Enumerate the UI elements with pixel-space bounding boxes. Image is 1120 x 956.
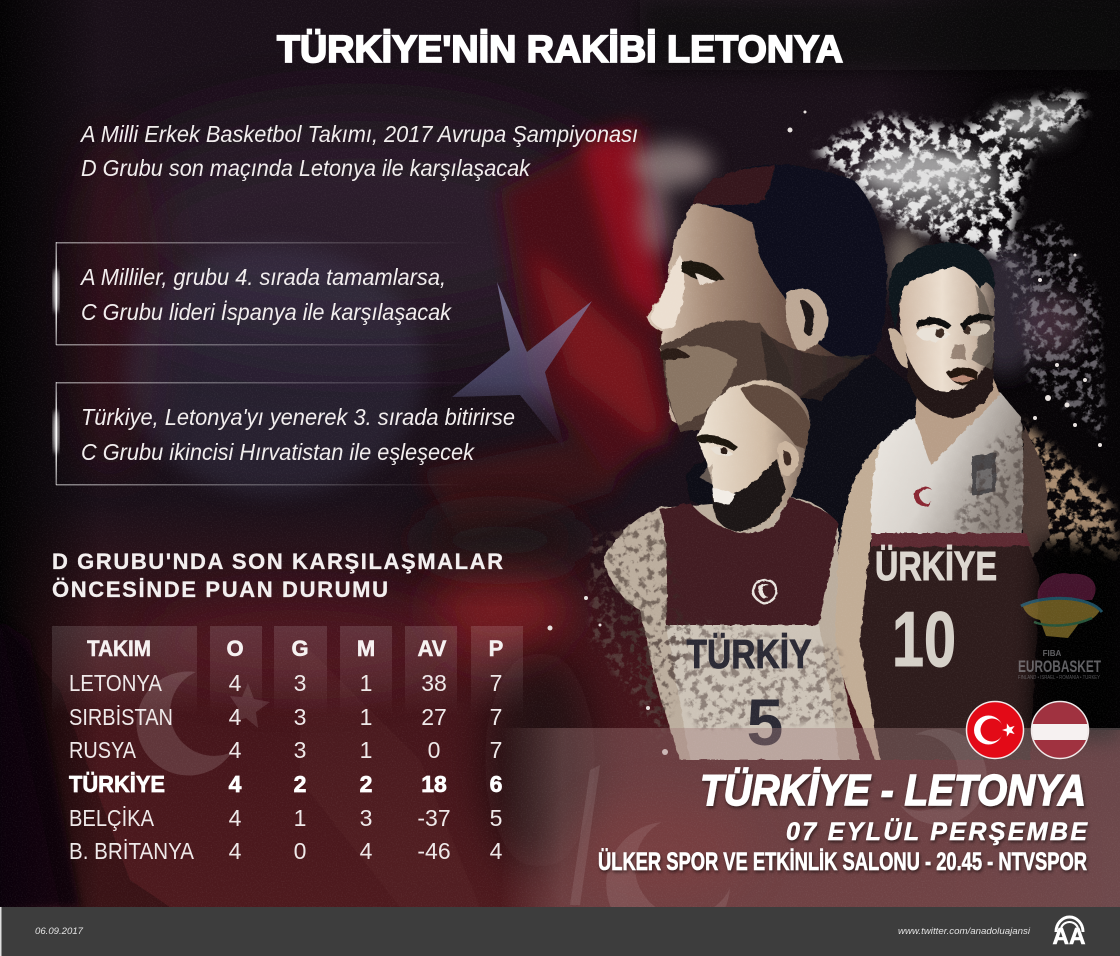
bottom player jersey text bbox=[686, 632, 812, 746]
panel: spain scenario: C Grubu lideri İspanya ile karşılaşacak bbox=[81, 299, 452, 325]
row: Sırbistan: 1 bbox=[360, 704, 372, 730]
row: Belçika: BELÇİKA bbox=[69, 805, 155, 831]
row: B. Britanya: 4 bbox=[490, 838, 503, 864]
row: Rusya: RUSYA bbox=[69, 737, 137, 763]
row: Rusya: 1 bbox=[360, 737, 372, 763]
row: B. Britanya: -46 bbox=[417, 838, 451, 864]
right player jersey text: ÜRKİYE bbox=[875, 543, 997, 589]
table header row: AV bbox=[418, 636, 447, 661]
row: Letonya: 38 bbox=[421, 670, 447, 696]
row: Letonya: 7 bbox=[490, 670, 502, 696]
row: Türkiye: TÜRKİYE bbox=[69, 771, 165, 797]
splatter behind players bbox=[548, 92, 1120, 755]
icon: Latvian flag bbox=[1030, 700, 1090, 760]
row: Belçika: 3 bbox=[360, 805, 372, 831]
row: B. Britanya: B. BRİTANYA bbox=[69, 838, 195, 864]
row: Belçika: 4 bbox=[229, 805, 242, 831]
portraits of the coach and two players bbox=[603, 165, 1120, 760]
icon: AA logo: AA bbox=[1052, 923, 1086, 949]
row: Türkiye: 4 bbox=[229, 771, 242, 797]
row: Türkiye: 6 bbox=[490, 771, 502, 797]
panel: spain scenario: A Milliler, grubu 4. sırada tamamlarsa, bbox=[79, 264, 446, 290]
date: 06.09.2017 bbox=[35, 926, 84, 937]
row: Sırbistan: 4 bbox=[229, 704, 242, 730]
row: Türkiye: 2 bbox=[360, 771, 372, 797]
right player jersey text: 10 bbox=[892, 595, 956, 683]
row: Sırbistan: 27 bbox=[421, 704, 447, 730]
row: Sırbistan bbox=[69, 704, 502, 730]
table header row bbox=[87, 636, 503, 661]
row: Rusya: 7 bbox=[490, 737, 502, 763]
row: Rusya bbox=[69, 737, 502, 763]
row: Rusya: 4 bbox=[229, 737, 242, 763]
match date: 07 EYLÜL PERŞEMBE bbox=[786, 817, 1088, 846]
title: TÜRKİYE'NİN RAKİBİ LETONYA bbox=[277, 28, 843, 71]
row: Türkiye bbox=[69, 771, 502, 797]
row: Belçika: 1 bbox=[294, 805, 306, 831]
row: Letonya: 1 bbox=[360, 670, 372, 696]
standings heading: D GRUBU'NDA SON KARŞILAŞMALAR bbox=[52, 549, 503, 574]
row: B. Britanya: 4 bbox=[229, 838, 242, 864]
row: Belçika bbox=[69, 805, 502, 831]
table header row: P bbox=[489, 636, 503, 661]
bottom player jersey text: TÜRKİY bbox=[686, 631, 812, 677]
standings table bbox=[52, 626, 523, 864]
table header row: M bbox=[357, 636, 375, 661]
EuroBasket logo: FINLAND • ISRAEL • ROMANIA • TURKEY bbox=[1018, 675, 1101, 681]
table header row: O bbox=[226, 636, 244, 661]
row: Türkiye: 2 bbox=[294, 771, 306, 797]
row: B. Britanya: 0 bbox=[294, 838, 306, 864]
intro text: A Milli Erkek Basketbol Takımı, 2017 Avrupa Şampiyonası bbox=[79, 121, 638, 147]
panel: spain scenario bbox=[54, 242, 476, 346]
row: Belçika: 5 bbox=[490, 805, 502, 831]
row: Belçika: -37 bbox=[417, 805, 451, 831]
row: Sırbistan: SIRBİSTAN bbox=[69, 704, 173, 730]
intro text bbox=[79, 121, 638, 181]
EuroBasket logo bbox=[1018, 573, 1102, 681]
bottom player jersey text: 5 bbox=[747, 685, 783, 759]
row: Türkiye: 18 bbox=[421, 771, 447, 797]
standings heading: ÖNCESİNDE PUAN DURUMU bbox=[52, 577, 388, 602]
row: Rusya: 3 bbox=[294, 737, 306, 763]
panel: croatia scenario: C Grubu ikincisi Hırvatistan ile eşleşecek bbox=[81, 439, 475, 465]
row: Letonya bbox=[69, 670, 502, 696]
lower event band bbox=[500, 728, 1120, 946]
faint table crescent bbox=[46, 672, 270, 907]
intro text: D Grubu son maçında Letonya ile karşılaşacak bbox=[81, 155, 531, 181]
row: Sırbistan: 7 bbox=[490, 704, 502, 730]
EuroBasket logo: FIBA bbox=[1043, 649, 1062, 658]
coach portrait bbox=[647, 165, 917, 560]
footer bar bbox=[0, 907, 1120, 956]
row: B. Britanya: 4 bbox=[360, 838, 373, 864]
icon: Turkish flag bbox=[966, 702, 1024, 758]
table header row: G bbox=[291, 636, 309, 661]
twitter address: www.twitter.com/anadoluajansi bbox=[898, 926, 1031, 937]
table header cells bbox=[52, 626, 523, 716]
faint flag crescent and star bbox=[125, 245, 592, 495]
right player portrait bbox=[833, 242, 1050, 760]
row: B. Britanya bbox=[69, 838, 503, 864]
paint splashes over jersey bbox=[650, 540, 1120, 740]
row: Letonya: LETONYA bbox=[69, 670, 163, 696]
panel: croatia scenario: Türkiye, Letonya'yı yenerek 3. sırada bitirirse bbox=[81, 404, 515, 430]
table header row: TAKIM bbox=[87, 636, 151, 661]
row: Letonya: 4 bbox=[229, 670, 242, 696]
bottom player portrait bbox=[603, 380, 860, 760]
row: Rusya: 0 bbox=[428, 737, 440, 763]
right player jersey text bbox=[876, 544, 996, 668]
row: Letonya: 3 bbox=[294, 670, 306, 696]
panel: croatia scenario bbox=[54, 382, 515, 486]
row: Sırbistan: 3 bbox=[294, 704, 306, 730]
standings heading bbox=[52, 549, 503, 602]
